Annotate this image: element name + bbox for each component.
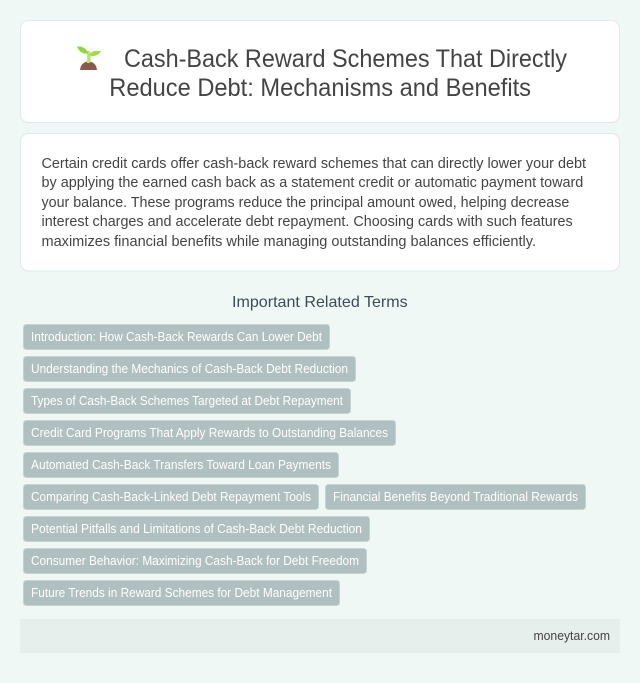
tag 10 [24, 580, 340, 606]
tag 1: Introduction: How Cash-Back Rewards Can Lower Debt [31, 330, 322, 344]
tag 3: Types of Cash-Back Schemes Targeted at Debt Repayment [31, 394, 343, 408]
tag 1 [24, 324, 330, 350]
description text: by applying the earned cash back as a statement credit or automatic payment toward [42, 175, 583, 191]
tag 2: Understanding the Mechanics of Cash-Back Debt Reduction [31, 362, 348, 376]
tag 10: Future Trends in Reward Schemes for Debt Management [31, 586, 332, 600]
tag 6 [24, 484, 318, 510]
tag 9: Consumer Behavior: Maximizing Cash-Back for Debt Freedom [31, 554, 359, 568]
footer source text: moneytar.com [534, 629, 610, 643]
footer [20, 619, 620, 653]
description text: interest charges and accelerate debt repayment. Choosing cards with such features [42, 214, 573, 230]
tag 4: Credit Card Programs That Apply Rewards to Outstanding Balances [31, 426, 388, 440]
tag 9 [24, 548, 366, 574]
tag 3 [24, 388, 350, 414]
tag list [24, 324, 586, 606]
panel: title card [20, 20, 620, 122]
tag 4 [24, 420, 396, 446]
tag 5 [24, 452, 338, 478]
description text [42, 156, 586, 250]
title text: Reduce Debt: Mechanisms and Benefits [109, 74, 531, 102]
tag 2 [24, 356, 356, 382]
description text: maximizes financial benefits while managing outstanding balances efficiently. [42, 234, 536, 250]
title text [109, 45, 567, 102]
tag 7: Financial Benefits Beyond Traditional Rewards [333, 490, 578, 504]
panel: description [20, 134, 620, 271]
icon: sprout [77, 46, 101, 70]
heading: important related terms: Important Related Terms [232, 294, 408, 311]
description text: Certain credit cards offer cash-back reward schemes that can directly lower your debt [42, 156, 586, 172]
title text: Cash-Back Reward Schemes That Directly [124, 45, 567, 73]
tag 7 [326, 484, 586, 510]
tag 5: Automated Cash-Back Transfers Toward Loan Payments [31, 458, 331, 472]
tag 8 [24, 516, 370, 542]
tag 8: Potential Pitfalls and Limitations of Cash-Back Debt Reduction [31, 522, 362, 536]
tag 6: Comparing Cash-Back-Linked Debt Repayment Tools [31, 490, 311, 504]
description text: your balance. These programs reduce the principal amount owed, helping decrease [42, 195, 569, 211]
